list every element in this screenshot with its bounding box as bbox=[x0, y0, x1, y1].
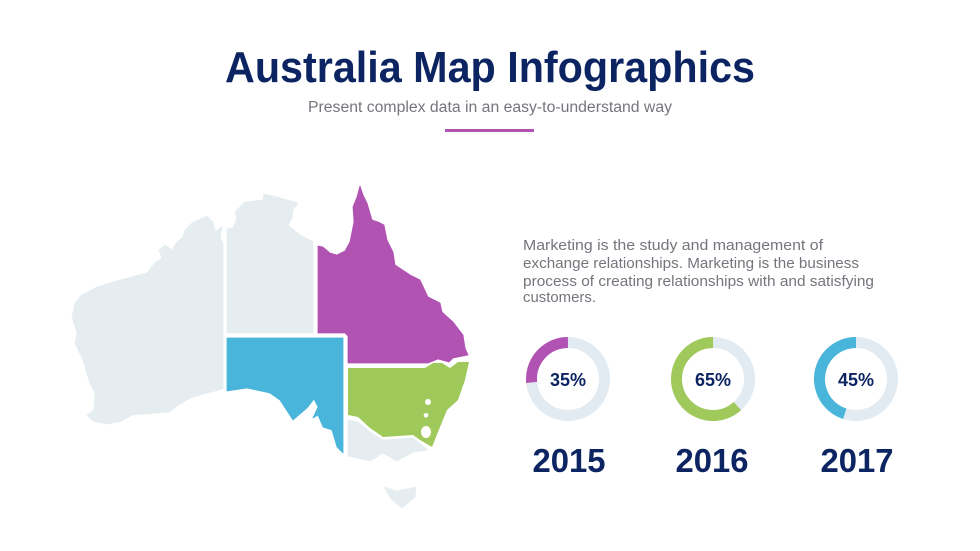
description text: Marketing is the study and management of bbox=[523, 238, 824, 254]
title: Australia Map Infographics bbox=[225, 43, 755, 92]
year 2016: 2016 bbox=[676, 442, 748, 479]
title underline bbox=[445, 129, 534, 132]
region: New South Wales bbox=[348, 362, 469, 447]
donut 2017 bbox=[810, 333, 902, 425]
description text: customers. bbox=[523, 290, 596, 306]
donut 2015 bbox=[528, 339, 608, 419]
region: South Australia bbox=[227, 338, 343, 453]
region: Victoria bbox=[348, 420, 428, 461]
year 2017: 2017 bbox=[820, 442, 894, 479]
description text: exchange relationships. Marketing is the business bbox=[523, 256, 859, 272]
donut 2016 bbox=[661, 327, 765, 431]
subtitle: Present complex data in an easy-to-understand way bbox=[308, 99, 672, 116]
map of Australia bbox=[72, 186, 469, 508]
region: Northern Territory bbox=[227, 194, 313, 333]
region: Western Australia bbox=[72, 216, 223, 424]
region: Tasmania bbox=[384, 487, 416, 508]
description text: process of creating relationships with and satisfying bbox=[523, 274, 874, 290]
year 2015: 2015 bbox=[532, 442, 606, 479]
donut 2016: 65% bbox=[695, 370, 731, 390]
region: Queensland bbox=[318, 186, 468, 363]
donut 2017: 45% bbox=[838, 370, 874, 390]
donut 2015: 35% bbox=[550, 370, 586, 390]
description text bbox=[523, 238, 874, 306]
